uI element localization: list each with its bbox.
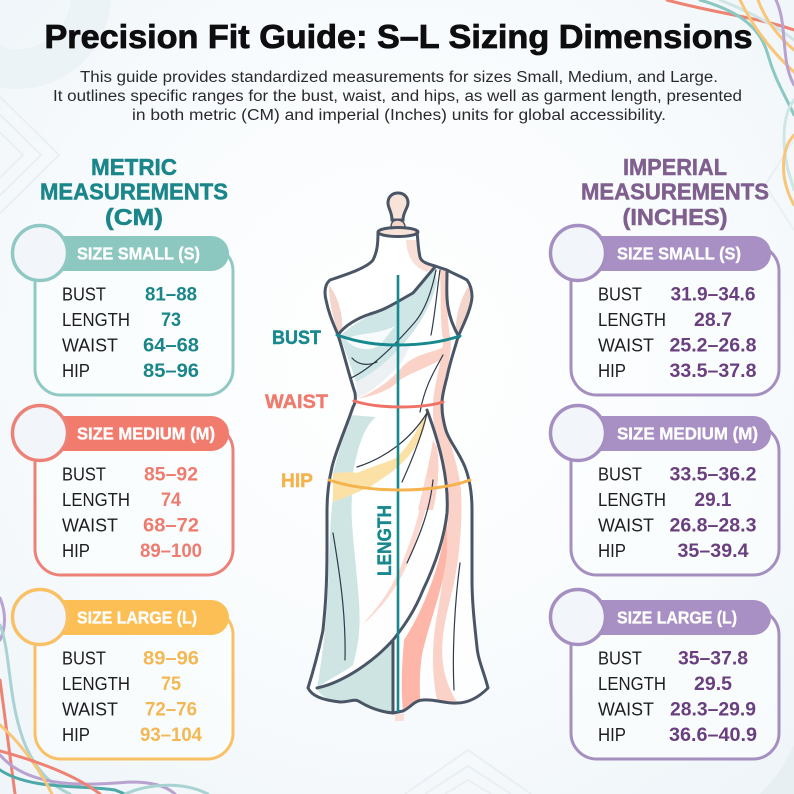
panel: imperial size small: WAIST [598, 336, 654, 356]
panel: imperial size medium: 35–39.4 [678, 541, 749, 562]
bust measurement line [337, 335, 460, 345]
heading: metric measurements: METRIC [91, 154, 177, 180]
decorative curves: top right [667, 0, 794, 205]
wrap hem seam [317, 410, 447, 713]
title: Precision Fit Guide: S–L Sizing Dimensions [44, 18, 752, 55]
label: waist: WAIST [265, 392, 328, 413]
panel: metric size medium: SIZE MEDIUM (M) [77, 424, 215, 444]
panel: metric size small [12, 226, 233, 395]
panel: imperial size small: HIP [598, 361, 626, 381]
panel: metric size medium [12, 406, 233, 575]
heading: imperial measurements: (INCHES) [622, 204, 728, 230]
panel: metric size small: SIZE SMALL (S) [77, 244, 200, 264]
neckline and armhole [338, 267, 459, 337]
panel: metric size medium: 89–100 [140, 541, 202, 562]
panel: metric size medium: BUST [62, 464, 106, 484]
panel: imperial size small: 25.2–26.8 [670, 336, 756, 356]
panel: imperial size medium: 26.8–28.3 [670, 516, 756, 536]
intro text: in both metric (CM) and imperial (Inches) units for global accessibility. [132, 107, 666, 124]
panel: metric size medium: 68–72 [143, 516, 199, 536]
panel: metric size small: HIP [62, 361, 90, 381]
panel: imperial size small: SIZE SMALL (S) [617, 244, 741, 264]
panel: imperial size small: 28.7 [694, 310, 732, 331]
panel: metric size small: 85–96 [143, 361, 199, 382]
label: length: LENGTH [375, 505, 396, 576]
panel: imperial size medium: 29.1 [694, 490, 732, 511]
panel: metric size medium: LENGTH [62, 490, 130, 510]
panel: metric size small: WAIST [62, 336, 118, 356]
label: hip: HIP [281, 471, 313, 492]
panel: imperial size medium: HIP [598, 541, 626, 561]
panel: imperial size medium: WAIST [598, 516, 654, 536]
panel: imperial size small: BUST [598, 284, 642, 304]
intro text: It outlines specific ranges for the bust, waist, and hips, as well as garment length, presented [53, 88, 742, 105]
panel: imperial size medium: 33.5–36.2 [670, 464, 756, 486]
panel: metric size large: HIP [62, 725, 90, 745]
panel: imperial size small: 33.5–37.8 [670, 361, 756, 382]
heading: imperial measurements [581, 154, 769, 230]
panel: imperial size large: SIZE LARGE (L) [617, 608, 737, 628]
panel: metric size small: BUST [62, 284, 106, 304]
panel: metric size large: 72–76 [145, 700, 197, 720]
panel: metric size large: BUST [62, 648, 106, 668]
illustration: dress on mannequin [308, 193, 488, 721]
panel: metric size large: 75 [161, 674, 181, 695]
panel: imperial size large: BUST [598, 648, 642, 668]
intro text: This guide provides standardized measurements for sizes Small, Medium, and Large. [80, 69, 718, 86]
heading: metric measurements: MEASUREMENTS [40, 178, 228, 204]
panel: metric size medium: 74 [161, 490, 181, 511]
dress outline [308, 232, 488, 713]
heading: metric measurements [40, 154, 228, 230]
panel: imperial size large: 35–37.8 [678, 648, 748, 670]
panel: imperial size medium: LENGTH [598, 490, 666, 510]
panel: imperial size large: 28.3–29.9 [670, 700, 756, 720]
decorative curves: bottom left [0, 598, 208, 794]
panel: metric size small: LENGTH [62, 310, 130, 330]
panel: metric size small: 81–88 [145, 284, 197, 306]
panel: metric size large [12, 590, 233, 759]
panel: metric size large: LENGTH [62, 674, 130, 694]
panel: imperial size large: LENGTH [598, 674, 666, 694]
panel: imperial size medium: BUST [598, 464, 642, 484]
panel: imperial size large: WAIST [598, 700, 654, 720]
panel: imperial size large [550, 590, 779, 759]
panel: imperial size large: 29.5 [694, 674, 732, 695]
intro text [53, 69, 742, 124]
panel: imperial size small [550, 226, 779, 395]
heading: metric measurements: (CM) [105, 204, 163, 230]
hem stub [395, 714, 404, 721]
arm and neck tints [329, 240, 470, 332]
panel: imperial size medium: SIZE MEDIUM (M) [617, 424, 758, 444]
length measurement line [397, 275, 399, 712]
panel: imperial size large: 36.6–40.9 [669, 725, 757, 746]
panel: metric size large: 89–96 [143, 648, 199, 670]
panel: metric size small: 73 [161, 310, 181, 331]
panel: metric size large: 93–104 [140, 725, 202, 746]
heading: imperial measurements: IMPERIAL [623, 154, 727, 180]
panel: imperial size large: HIP [598, 725, 626, 745]
hip measurement line [329, 480, 470, 490]
panel: metric size medium: 85–92 [144, 464, 198, 486]
panel: imperial size small: LENGTH [598, 310, 666, 330]
panel: metric size medium: WAIST [62, 516, 118, 536]
panel: metric size large: WAIST [62, 700, 118, 720]
mannequin stand [378, 193, 418, 236]
label: bust: BUST [272, 328, 321, 349]
panel: metric size small: 64–68 [143, 336, 199, 356]
panel: imperial size small: 31.9–34.6 [670, 284, 756, 306]
body fill [308, 232, 488, 713]
fold lines [333, 270, 460, 690]
drape colour bands [317, 268, 461, 713]
panel: metric size large: SIZE LARGE (L) [77, 608, 197, 628]
heading: imperial measurements: MEASUREMENTS [581, 178, 769, 204]
waist measurement line [354, 401, 443, 407]
panel: imperial size medium [550, 406, 779, 575]
panel: metric size medium: HIP [62, 541, 90, 561]
